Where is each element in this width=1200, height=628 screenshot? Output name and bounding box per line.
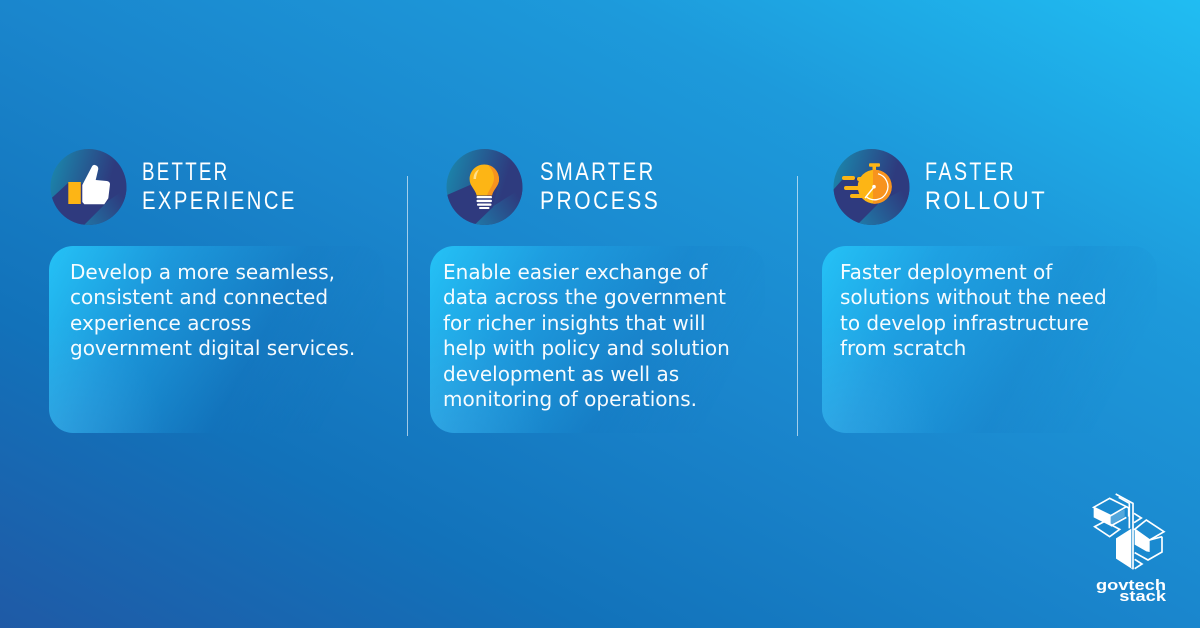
text card — [49, 246, 384, 433]
heading: FASTER — [925, 158, 1016, 186]
body text — [840, 260, 1107, 360]
body text: to develop infrastructure — [840, 311, 1089, 335]
heading: PROCESS — [540, 187, 660, 215]
logo wordmark: govtech — [1096, 578, 1166, 594]
heading — [142, 158, 297, 215]
text card — [430, 246, 765, 433]
body text: for richer insights that will — [443, 311, 705, 335]
heading — [925, 158, 1047, 215]
heading: BETTER — [142, 158, 229, 186]
body text — [70, 260, 355, 360]
text card — [822, 246, 1157, 433]
body text: Develop a more seamless, — [70, 260, 335, 284]
body text: consistent and connected — [70, 285, 328, 309]
body text: Enable easier exchange of — [443, 260, 708, 284]
heading: EXPERIENCE — [142, 187, 297, 215]
logo wordmark — [1096, 578, 1166, 605]
divider — [797, 176, 798, 436]
body text: solutions without the need — [840, 285, 1107, 309]
icon: stopwatch — [834, 149, 910, 225]
icon: thumbs up — [50, 149, 126, 225]
logo mark: isometric cubes — [1092, 493, 1166, 570]
body text: data across the government — [443, 285, 726, 309]
heading — [540, 158, 660, 215]
body text: development as well as — [443, 362, 679, 386]
body text — [443, 260, 730, 411]
panel: faster rollout — [822, 149, 1107, 433]
divider — [407, 176, 408, 436]
heading: SMARTER — [540, 158, 656, 186]
body text: help with policy and solution — [443, 336, 730, 360]
body text: from scratch — [840, 336, 966, 360]
body text: government digital services. — [70, 336, 355, 360]
body text: monitoring of operations. — [443, 387, 697, 411]
logo: govtech stack — [1092, 493, 1166, 605]
logo wordmark: stack — [1119, 589, 1166, 605]
panel: better experience — [49, 149, 355, 433]
body text: experience across — [70, 311, 251, 335]
body text: Faster deployment of — [840, 260, 1052, 284]
panel: smarter process — [430, 149, 730, 433]
heading: ROLLOUT — [925, 187, 1047, 215]
icon: light bulb — [446, 149, 522, 225]
